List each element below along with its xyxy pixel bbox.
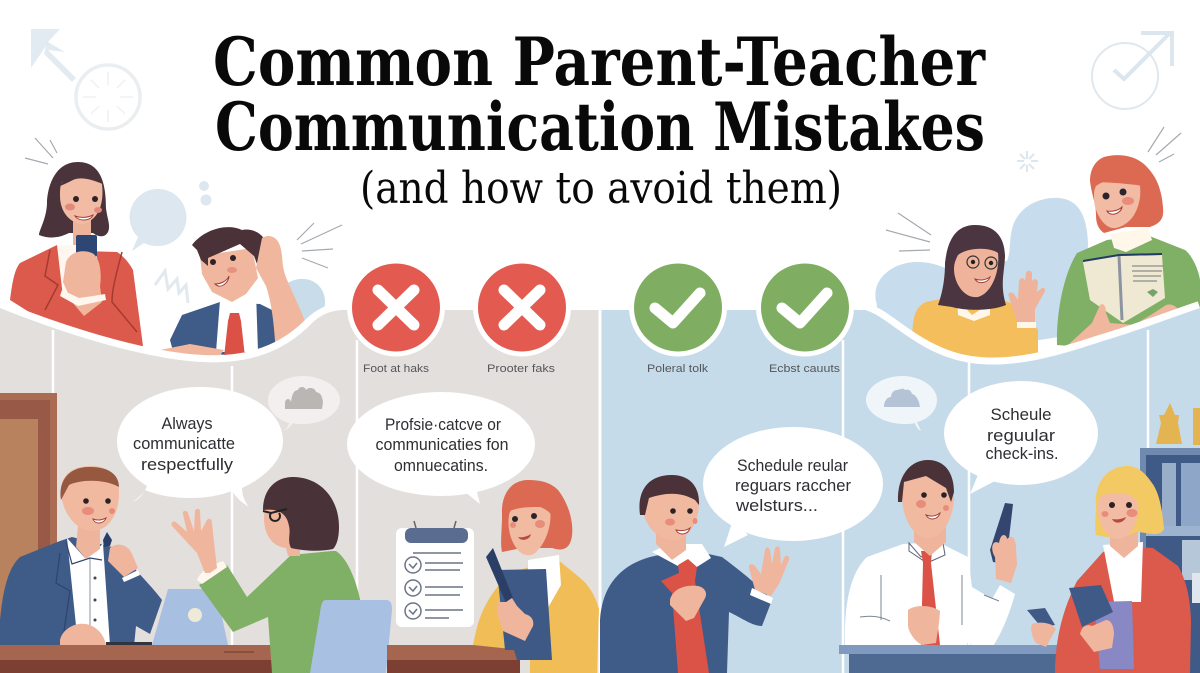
chair: [310, 600, 392, 673]
person: man in navy suit with red tie: [600, 475, 789, 673]
speech bubble: Scheule reguular check-ins.: check-ins.: [986, 445, 1058, 463]
person: woman in green jacket: [171, 477, 360, 673]
person: blonde woman in red jacket: [1027, 466, 1191, 673]
speech bubble: Profsie-catcve or communicaties fon omnuecatins.: [347, 392, 535, 504]
person: man in white shirt with phone: [845, 460, 1017, 673]
title: (and how to avoid them): [360, 163, 842, 214]
person: woman in red blazer: [10, 162, 143, 346]
panel: solutions background: [600, 308, 1200, 673]
speech bubble: Schedule reular reguars raccher welsturs...: Schedule reular: [737, 457, 848, 475]
speech bubble: Schedule reular reguars raccher welsturs...: reguars raccher: [735, 477, 851, 495]
panel: mistakes background: [0, 308, 600, 673]
speech bubble: Profsie-catcve or communicaties fon omnuecatins.: communicaties fon: [376, 436, 508, 454]
title: Common Parent-Teacher: [213, 23, 986, 101]
icon: green check 2: [756, 258, 854, 356]
speech bubble: small people icon right: [866, 376, 937, 431]
icon: faded clock and arrow top right: [1092, 33, 1172, 109]
desk left: [0, 645, 274, 673]
speech bubble: Scheule reguular check-ins.: Scheule: [990, 406, 1052, 424]
label: Prooter faks: Prooter faks: [487, 363, 556, 375]
person: man scratching head: [160, 227, 306, 359]
person: red-haired woman in yellow jacket: [473, 480, 599, 673]
title: [213, 23, 986, 214]
label: Poleral tolk: Poleral tolk: [647, 363, 709, 375]
person: woman holding open book: [1057, 155, 1200, 357]
decorations: faded speech bubble and dots left: [130, 181, 325, 335]
speech bubble: Schedule reular reguars raccher welsturs...: welsturs...: [735, 497, 818, 515]
desk middle: [387, 645, 540, 673]
icon: red cross 1: [347, 258, 445, 356]
speech bubble: Profsie-catcve or communicaties fon omnuecatins.: omnuecatins.: [394, 457, 488, 475]
speech bubble: Schedule reular reguars raccher welsturs...: [703, 427, 883, 547]
decorations: emphasis rays: [25, 127, 1181, 268]
decoration: sparkle right: [1017, 151, 1038, 172]
person: man in navy suit at desk: [0, 466, 162, 646]
decoration: blue blobs behind right characters: [874, 198, 1088, 363]
speech bubble: Scheule reguular check-ins.: [944, 381, 1098, 494]
speech bubble: Scheule reguular check-ins.: reguular: [987, 427, 1056, 445]
title: Communication Mistakes: [215, 88, 985, 166]
icon: red cross 2: [473, 258, 571, 356]
speech bubble: Profsie-catcve or communicaties fon omnuecatins.: Profsie·catcve or: [385, 416, 501, 434]
speech bubble: Always communicatte respectfully: Always: [162, 415, 212, 433]
bookshelf with trophies: [1140, 403, 1200, 673]
checklist: [396, 521, 474, 627]
door: [0, 393, 57, 648]
label: Ecbst cauuts: Ecbst cauuts: [769, 363, 841, 375]
label: Foot at haks: Foot at haks: [363, 363, 430, 375]
icon: green check 1: [629, 258, 727, 356]
laptop: [106, 589, 228, 646]
icon: faded clock and arrow top left: [31, 29, 140, 129]
speech bubble: Always communicatte respectfully: communicatte: [133, 435, 235, 453]
person: woman with glasses waving: [912, 225, 1045, 370]
speech bubble: Always communicatte respectfully: respectfully: [141, 456, 234, 474]
speech bubble: Always communicatte respectfully: [117, 387, 283, 507]
speech bubble: small people icon left: [268, 376, 340, 431]
podium: [839, 645, 1103, 673]
